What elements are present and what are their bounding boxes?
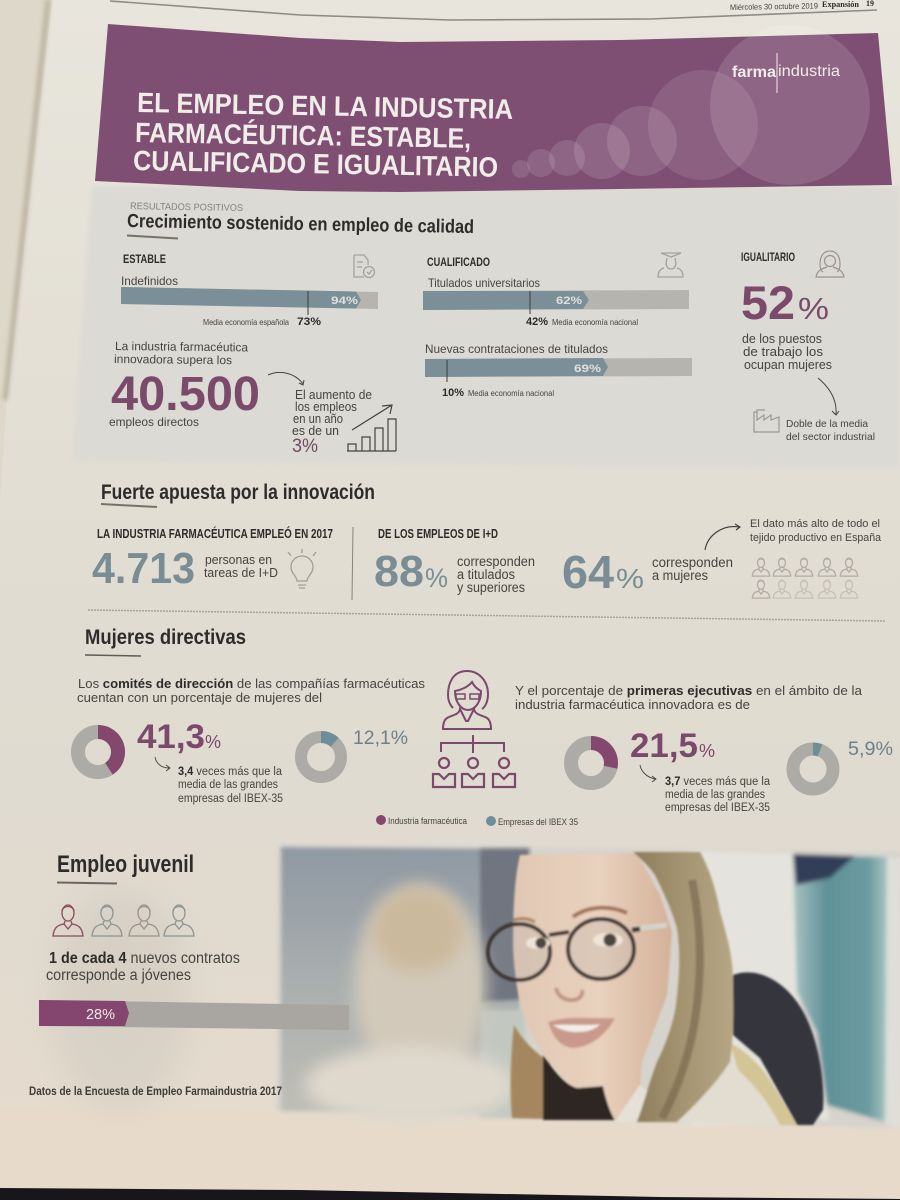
column: estable: Indefinidos [121, 274, 178, 288]
column: cualificado: 42% [526, 316, 548, 328]
donut: 41,3% [78, 732, 118, 772]
title: EL EMPLEO EN LA INDUSTRIA [137, 87, 513, 125]
I+D percent stats: corresponden [457, 554, 535, 569]
stat: 40.500 empleos: empleos directos [109, 415, 199, 429]
note: 3,7 veces [640, 765, 771, 814]
job growth note [292, 387, 372, 457]
lower paper below photo [0, 1107, 900, 1200]
logo farmaindustria: industria [778, 63, 840, 80]
stat: 21,5%: 21,5 [630, 727, 698, 765]
donut: 12,1% [301, 737, 341, 777]
I+D staff: personas en [205, 552, 272, 567]
note: highest figure [750, 518, 882, 544]
intro: comités de dirección [77, 676, 425, 705]
dark table edge below paper [0, 1188, 900, 1200]
icon: contract [354, 255, 374, 278]
icons: four young people [53, 905, 194, 936]
column: estable: Media economía española [203, 318, 290, 327]
note: 3,4 veces [155, 757, 283, 805]
bar: indefinidos 94% [121, 287, 378, 315]
intro: comités de dirección: Los comités de dirección de las compañías farmacéuticas [78, 676, 425, 691]
I+D percent stats: a mujeres [652, 568, 708, 583]
intro: primeras ejecutivas: industria farmacéutica innovadora es de [515, 697, 750, 712]
stat: 12,1%: 12,1% [353, 728, 408, 749]
intro: primeras ejecutivas [515, 683, 863, 712]
stat: 64%: 64 [562, 546, 614, 598]
icon: woman [816, 251, 844, 277]
I+D staff: LA INDUSTRIA FARMACÉUTICA EMPLEÓ EN 2017 [97, 526, 333, 541]
glasses [488, 919, 634, 980]
note: 3,4 veces: empresas del IBEX-35 [178, 793, 283, 805]
woman [488, 852, 823, 1125]
panel: innovación [92, 481, 882, 600]
hair left [511, 1025, 575, 1120]
hair right [633, 852, 733, 1122]
running head: Expansión [822, 0, 860, 9]
note: highest figure: tejido productivo en España [750, 532, 882, 544]
column: cualificado: Nuevas contrataciones de titulados [425, 342, 608, 356]
panel: crecimiento sostenido [109, 201, 875, 457]
stat: 88%: % [425, 563, 448, 593]
section heading: Mujeres directivas [85, 626, 246, 649]
donut: 21,5% [571, 743, 611, 783]
decorative header circles [512, 25, 870, 185]
stat: 40.500 empleos: 40.500 [111, 368, 260, 421]
column: estable [121, 254, 378, 328]
stat: 40.500 empleos: La industria farmacéutica [115, 339, 248, 354]
bar: 28% [39, 1000, 349, 1030]
donut: 5,9% [793, 749, 833, 789]
I+D percent stats: corresponden [652, 555, 733, 570]
icon: graduate [658, 253, 683, 277]
stat: 40.500 empleos [109, 339, 260, 429]
icon: bulb [288, 549, 316, 588]
note: 3,7 veces: 3,7 veces más que la [665, 776, 771, 788]
logo farmaindustria [732, 53, 840, 93]
arrow: to sector note [818, 378, 839, 415]
column: igualitario: ocupan mujeres [744, 358, 832, 372]
column: igualitario: Doble de la media [786, 418, 868, 430]
panel: mujeres directivas [77, 626, 893, 827]
photo: smiling woman with glasses [50, 845, 900, 1128]
underlying page at left edge [0, 0, 52, 500]
legend: Empresas del IBEX 35 [498, 817, 578, 827]
note: 3,7 veces: media de las grandes [665, 789, 765, 801]
chart: rising bars [347, 405, 396, 451]
source note: Datos de la Encuesta de Empleo Farmaindustria 2017 [29, 1086, 282, 1098]
logo farmaindustria: farma [732, 64, 776, 81]
column: estable: ESTABLE [123, 254, 166, 266]
nose [556, 988, 582, 1000]
intro: comités de dirección: cuentan con un porcentaje de mujeres del [77, 690, 322, 705]
face [513, 853, 672, 1120]
icons: 10 people, light [752, 558, 858, 598]
blurred colleague [305, 885, 515, 1123]
text: 1 de cada 4 [46, 950, 240, 984]
bar: 28%: 28% [86, 1006, 115, 1023]
stat: 5,9%: 5,9% [848, 739, 893, 760]
text: 1 de cada 4: 1 de cada 4 nuevos contratos [49, 950, 240, 967]
icon: factory [754, 410, 779, 432]
legend: Industria farmacéutica [388, 816, 467, 826]
title [133, 87, 513, 183]
column: cualificado: 10% [442, 387, 464, 399]
text: 1 de cada 4: corresponde a jóvenes [46, 967, 191, 984]
note: 3,7 veces: empresas del IBEX-35 [665, 802, 770, 814]
stat: 88% [374, 547, 448, 596]
column: cualificado [423, 253, 692, 399]
job growth note: El aumento de [295, 387, 372, 402]
shirt [677, 1058, 790, 1125]
note: highest figure: El dato más alto de todo el [750, 518, 880, 530]
eyes and brows [513, 908, 627, 949]
column: igualitario: de los puestos [742, 332, 822, 346]
column: estable: 73% [297, 316, 321, 328]
column: igualitario: de trabajo los [743, 345, 823, 359]
bar: nuevas contrataciones 69%: 69% [574, 363, 601, 375]
stat: 52%: % [798, 291, 829, 326]
bleed-through shadow on the left [50, 890, 190, 1110]
column: cualificado: Media economía nacional [468, 389, 554, 398]
job growth note: en un año [293, 411, 343, 426]
blurred background [276, 845, 900, 1128]
stat: 52%: 52 [741, 276, 795, 329]
section heading: Fuerte apuesta por la innovación [101, 481, 375, 504]
title: FARMACÉUTICA: ESTABLE, [135, 117, 471, 154]
I+D staff: 4.713 [92, 544, 195, 593]
I+D staff [92, 526, 333, 593]
stat: 64% [562, 546, 644, 598]
stat: 64%: % [616, 563, 644, 594]
I+D percent stats: y superiores [457, 580, 525, 595]
stat: 41,3%: % [205, 732, 221, 752]
bar: titulados 62% [423, 290, 689, 314]
header banner [95, 24, 892, 192]
job growth note: es de un [292, 423, 339, 438]
bar: indefinidos 94%: 94% [331, 295, 358, 307]
column: cualificado: Titulados universitarios [428, 276, 540, 290]
column: cualificado: CUALIFICADO [427, 257, 490, 269]
note: 3,4 veces: media de las grandes [178, 779, 278, 791]
bar: titulados 62%: 62% [556, 295, 582, 307]
stat: 40.500 empleos: innovadora supera los [114, 352, 232, 367]
intro: primeras ejecutivas: Y el porcentaje de primeras ejecutivas en el ámbito de la [515, 683, 863, 698]
column: cualificado: Media economía nacional [552, 318, 638, 327]
stat: 88%: 88 [374, 547, 424, 596]
section heading: Empleo juvenil [57, 851, 194, 878]
icon: woman over org chart [433, 671, 515, 787]
mouth [548, 1018, 615, 1048]
title: CUALIFICADO E IGUALITARIO [133, 145, 498, 183]
section heading: Crecimiento sostenido en empleo de calidad [127, 211, 474, 238]
stat: 21,5%: % [699, 741, 715, 761]
job growth note: 3% [292, 436, 318, 457]
I+D percent stats: DE LOS EMPLEOS DE I+D [378, 526, 498, 541]
bar: nuevas contrataciones 69% [425, 358, 692, 382]
running head [110, 0, 877, 20]
I+D staff: tareas de I+D [204, 565, 278, 580]
legend [376, 815, 578, 827]
stat: 41,3%: 41,3 [137, 718, 205, 756]
column: igualitario: IGUALITARIO [741, 252, 795, 264]
arrow: to job growth [268, 372, 304, 385]
stat: 52% [741, 276, 829, 329]
column: igualitario [741, 251, 875, 443]
person behind, dark [733, 972, 823, 1125]
arrow: to highest figure note [705, 524, 740, 550]
job growth note: los empleos [295, 399, 357, 414]
I+D percent stats: a titulados [457, 567, 515, 582]
running head: Miércoles 30 octubre 2019 [730, 1, 819, 12]
tinted results area [72, 186, 900, 468]
section kicker: RESULTADOS POSITIVOS [130, 201, 243, 214]
I+D percent stats [374, 526, 733, 598]
column: igualitario: del sector industrial [786, 431, 875, 443]
panel: empleo juvenil [29, 851, 349, 1098]
note: 3,4 veces: 3,4 veces más que la [178, 766, 283, 778]
